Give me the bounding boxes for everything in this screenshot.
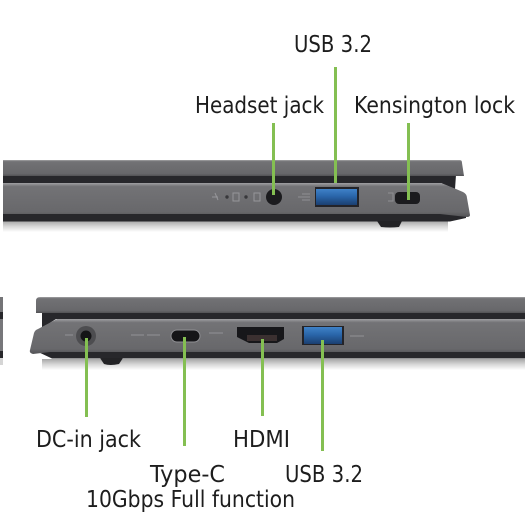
bottom laptop dark hinge and bottom [36,312,525,358]
line: dc-in jack [85,338,88,417]
port markings [65,333,364,336]
shadow under top laptop [3,221,448,232]
hdmi port [237,327,284,343]
label: dc-in jack: DC-in jack [36,427,142,453]
top laptop lid [3,160,464,176]
led icons [225,195,248,199]
top laptop dark hinge and bottom [3,175,466,222]
label: 10gbps full function: 10Gbps Full function [86,487,295,513]
type-c port [171,330,200,342]
label: usb 3.2 top: USB 3.2 [294,32,372,58]
bottom laptop lid [36,297,525,313]
bottom laptop: left side view [0,297,525,370]
line: hdmi [261,339,264,416]
kensington lock slot [395,192,420,204]
label: headset jack: Headset jack [195,93,325,119]
label: usb 3.2 bottom: USB 3.2 [285,462,363,488]
usb 3.2 port left [302,326,344,345]
line: kensington lock [407,123,410,200]
bottom laptop base [30,319,525,354]
line: usb 3.2 top [334,67,337,183]
hdmi inner [247,335,277,341]
bottom laptop rubber foot [100,358,123,365]
usb 3.2 port right [315,187,359,207]
line: usb 3.2 bottom [321,340,324,451]
line: headset jack [272,123,275,195]
green callout lines [85,67,410,451]
label: hdmi: HDMI [233,427,290,453]
left laptop sliver [0,297,3,365]
top laptop base [3,183,470,217]
shadow under bottom laptop [42,359,525,370]
dc-in jack port [76,326,96,346]
headset jack port [266,189,282,205]
label: type-c: Type-C [149,462,225,488]
line: type-c [183,337,186,446]
top laptop rubber foot [377,221,402,228]
status markings [212,193,260,201]
usb symbol [298,193,393,201]
top laptop: right side view [3,160,470,232]
